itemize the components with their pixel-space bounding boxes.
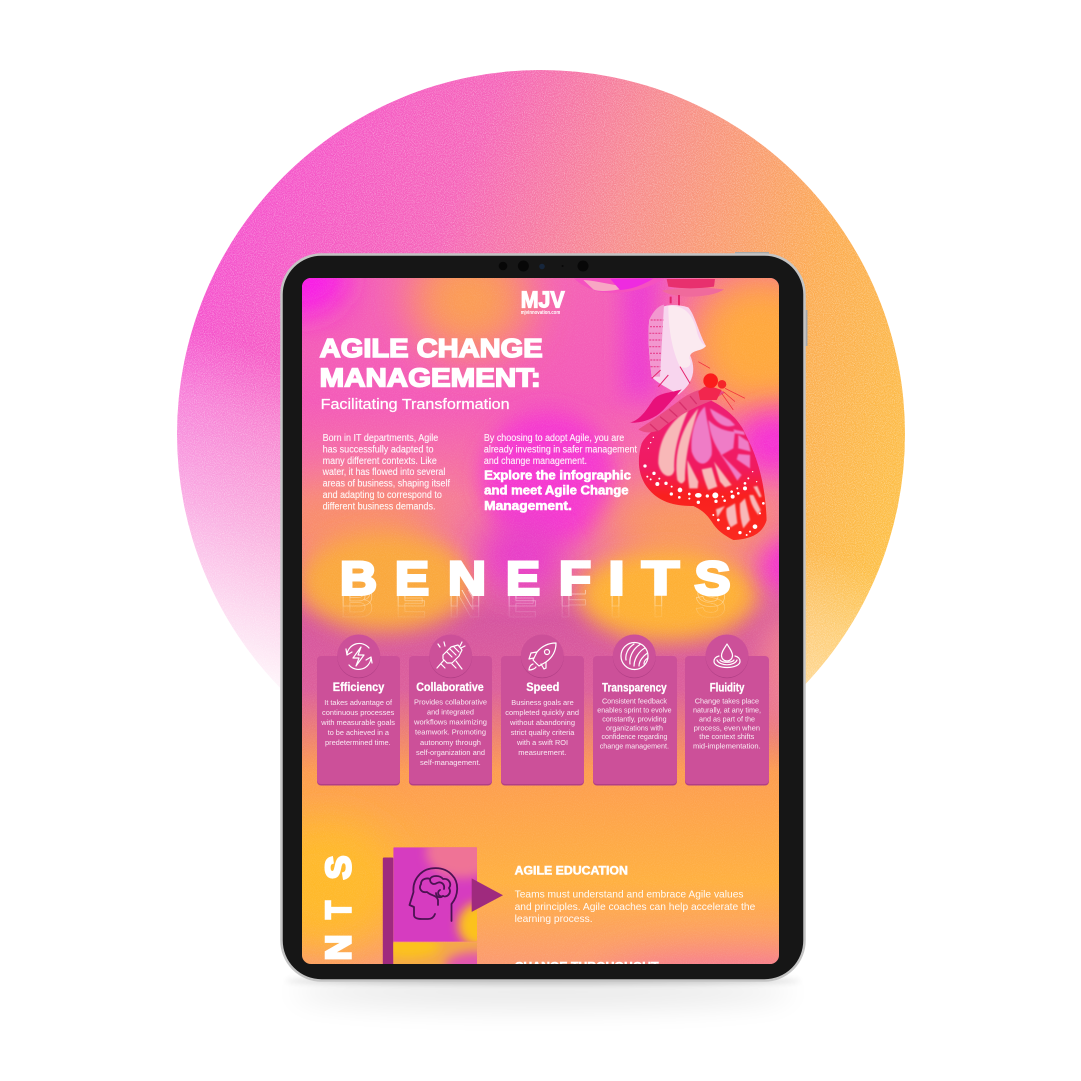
abdomen	[638, 388, 725, 432]
circle grain	[177, 70, 905, 683]
card: speed	[501, 634, 584, 786]
section: agile education	[515, 865, 755, 925]
vertical heading fragment: N	[320, 935, 358, 960]
arrow	[472, 878, 503, 912]
card: efficiency: Efficiency	[333, 682, 385, 694]
card: speed: measurement.	[518, 748, 566, 757]
book graphic with brain icon	[382, 847, 503, 964]
card: fluidity: mid-implementation.	[693, 741, 761, 750]
card: collaborative: autonomy through	[420, 738, 481, 747]
icon: water drop	[714, 644, 740, 668]
tablet screen	[302, 278, 779, 964]
card: fluidity: naturally, at any time,	[693, 706, 761, 714]
butterfly head and antennae	[698, 362, 745, 410]
card: transparency: enables sprint to evolve	[597, 706, 672, 714]
card: fluidity: the context shifts	[699, 732, 754, 741]
top leaf	[574, 278, 724, 306]
intro paragraph left: areas of business, shaping itself	[323, 479, 450, 490]
camera dots	[499, 260, 588, 272]
benefits heading: S	[694, 551, 730, 604]
background circle	[177, 70, 905, 686]
vertical heading fragment: S	[320, 856, 358, 880]
benefits heading: B	[340, 551, 377, 604]
chrysalis shell	[649, 305, 706, 395]
card: speed: with a swift ROI	[516, 738, 568, 747]
card: collaborative: self-organization and	[416, 748, 485, 757]
call to action: and meet Agile Change	[484, 484, 629, 498]
icon: cycle with lightning bolt	[346, 643, 372, 669]
card: fluidity: and as part of the	[699, 714, 755, 723]
card: efficiency: continuous processes	[322, 708, 394, 717]
icon: hatched globe	[621, 642, 648, 670]
intro paragraph left: water, it has flowed into several	[322, 467, 445, 478]
card: transparency	[593, 634, 677, 786]
section: agile education: AGILE EDUCATION	[515, 865, 628, 877]
intro paragraph left: Born in IT departments, Agile	[323, 433, 439, 444]
card: transparency: constantly, providing	[602, 714, 667, 723]
card: collaborative: teamwork. Promoting	[415, 728, 486, 737]
title	[319, 338, 542, 388]
card: speed: without abandoning	[509, 718, 575, 727]
card: transparency: Consistent feedback	[602, 697, 667, 706]
section: agile education: learning process.	[515, 913, 593, 925]
icon: clasped hands	[437, 642, 465, 669]
icon: rocket	[529, 643, 556, 670]
benefits heading: E	[506, 551, 540, 604]
card: speed: Business goals are	[511, 698, 574, 707]
intro paragraph left: different business demands.	[323, 501, 436, 512]
butterfly and chrysalis illustration	[574, 278, 773, 543]
intro paragraph left	[322, 433, 450, 512]
intro paragraph left: has successfully adapted to	[323, 444, 434, 455]
benefits heading: T	[642, 551, 679, 604]
card: collaborative: and integrated	[427, 708, 474, 716]
intro paragraph right: and change management.	[484, 456, 587, 467]
vertical heading fragment	[324, 856, 352, 960]
wing cells	[658, 407, 762, 528]
card: fluidity: Change takes place	[695, 697, 759, 706]
section heading: change throughout: CHANGE THROUGHOUT	[515, 962, 659, 974]
book cover lower	[393, 942, 477, 964]
card: speed: completed quickly and	[505, 708, 579, 717]
card: transparency: change management.	[600, 741, 669, 750]
card: speed: strict quality criteria	[511, 728, 575, 737]
card: collaborative: workflows maximizing	[413, 718, 487, 727]
wing	[638, 400, 766, 540]
intro paragraph right	[484, 433, 637, 513]
benefits heading: I	[608, 551, 624, 604]
card: efficiency: It takes advantage of	[324, 698, 393, 707]
gradient blobs	[302, 278, 779, 964]
benefits heading: N	[448, 551, 486, 604]
card: efficiency: with measurable goals	[320, 718, 395, 727]
logo: MJV	[521, 286, 565, 312]
benefits heading: F	[559, 551, 591, 604]
title: MANAGEMENT:	[320, 362, 541, 392]
intro paragraph right: By choosing to adopt Agile, you are	[484, 433, 625, 444]
card: fluidity: Fluidity	[710, 682, 745, 694]
card: collaborative: Provides collaborative	[414, 698, 487, 706]
benefits reflection outlines: BENEFITS	[340, 574, 726, 627]
call to action	[484, 468, 631, 513]
section: agile education: Teams must understand and embrace Agile values	[515, 889, 744, 901]
card: efficiency: predetermined time.	[325, 738, 391, 747]
icon: brain in head	[410, 868, 457, 921]
card: speed: Speed	[526, 682, 559, 694]
intro paragraph left: and adapting to correspond to	[323, 490, 442, 501]
card: collaborative: Collaborative	[416, 682, 484, 694]
intro paragraph right: already investing in safer management	[484, 444, 637, 455]
benefits reflection outlines: BENEFITS	[340, 563, 726, 616]
card: fluidity: process, even when	[694, 723, 760, 732]
dark leaf behind abdomen	[630, 389, 682, 423]
title: AGILE CHANGE	[320, 333, 543, 363]
card: fluidity	[685, 634, 769, 786]
tablet drop shadow	[285, 976, 801, 1008]
call to action: Management.	[484, 499, 572, 513]
section: agile education: and principles. Agile coaches can help accelerate the	[515, 901, 755, 913]
book cover upper	[393, 847, 477, 942]
benefits heading: E	[395, 551, 429, 604]
card: efficiency	[317, 634, 400, 786]
vertical heading fragment: T	[320, 901, 358, 919]
benefits reflection outlines	[342, 590, 725, 618]
logo: mjvinnovation.com	[521, 310, 561, 316]
tablet device	[282, 252, 808, 980]
card: efficiency: to be achieved in a	[328, 728, 390, 737]
card: transparency: confidence regarding	[602, 732, 668, 741]
call to action: Explore the infographic	[484, 468, 631, 482]
card: transparency: Transparency	[602, 682, 667, 694]
subtitle: Facilitating Transformation	[321, 396, 510, 413]
card: transparency: organizations with	[606, 723, 663, 732]
intro paragraph left: many different contexts. Like	[323, 456, 437, 467]
card: collaborative: self-management.	[420, 758, 481, 767]
card: collaborative	[409, 634, 492, 786]
screen grain	[302, 278, 779, 964]
benefits heading	[342, 560, 730, 596]
wing dots	[643, 437, 765, 536]
